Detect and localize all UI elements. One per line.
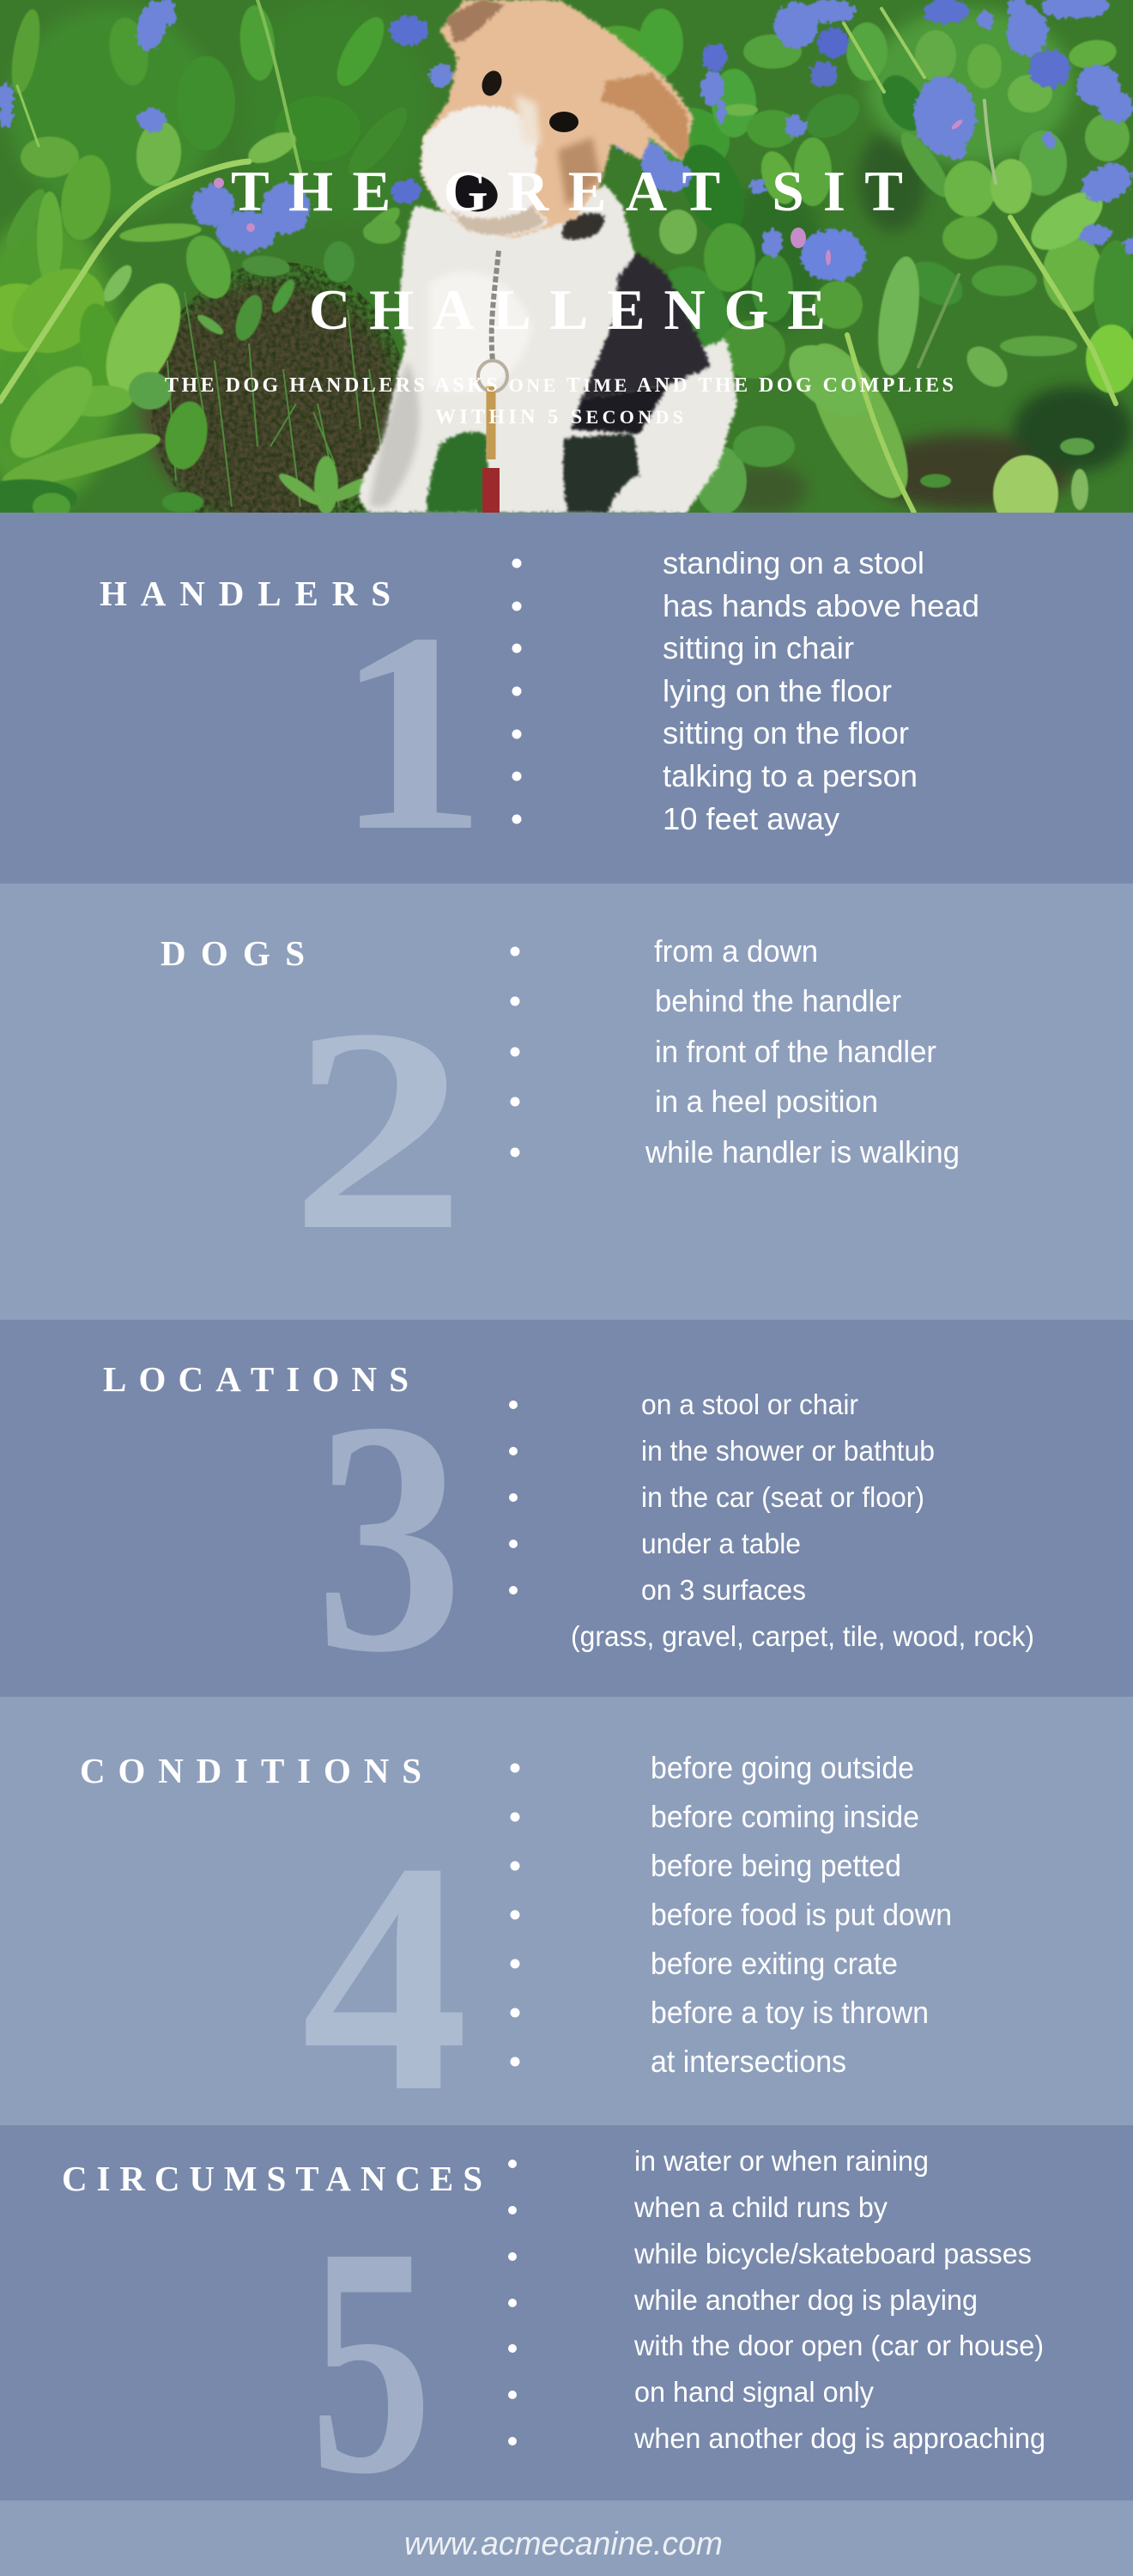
panel: handlers [0,513,1133,890]
conditions list: before food is put down [651,1897,952,1932]
hero subtitle [165,378,953,424]
dogs list: from a down [654,933,818,969]
number 4: 4 [301,1794,469,2160]
neck shadow [562,213,605,240]
fur shading on chest [429,271,532,392]
circumstances list: when another dog is approaching [633,2422,1045,2454]
circumstances list: with the door open (car or house) [633,2330,1044,2361]
ear shadow [601,73,689,161]
locations list: in the car (seat or floor) [641,1481,924,1513]
number 3: 3 [315,1353,464,1721]
circumstances list [508,2145,1045,2454]
handlers list: sitting in chair [663,630,854,665]
heading: dogs: DOGS [161,933,305,973]
hero subtitle: THE DOG HANDLERS ASKS ONE TIME AND THE DOG COMPLIES [165,374,954,397]
number 2: 2 [290,969,466,1291]
dogs list [510,933,960,1170]
heading: handlers: HANDLERS [100,574,391,613]
conditions list [510,1750,952,2079]
dogs list: in a heel position [655,1084,878,1119]
white muzzle and cheek [421,106,549,236]
handlers list: sitting on the floor [663,715,909,750]
number 1: 1 [336,574,487,890]
circumstances list: in water or when raining [634,2145,929,2177]
circumstances list: on hand signal only [634,2376,874,2408]
foliage between front legs [427,432,488,513]
website url: www.acmecanine.com [404,2526,723,2562]
handlers list: 10 feet away [663,801,839,836]
panel: circumstances [0,2125,1133,2542]
handlers list: standing on a stool [663,545,924,580]
dogs list: behind the handler [655,983,901,1018]
pink buds [214,118,964,265]
panel: conditions [0,1697,1133,2160]
hero subtitle: WITHIN 5 SECONDS [435,406,683,428]
grass blades [167,292,386,507]
black patch [581,252,711,401]
locations list [509,1388,1034,1652]
locations list: on 3 surfaces [641,1574,806,1606]
panel: dogs [0,884,1133,1320]
dogs list: while handler is walking [645,1134,960,1170]
handlers list: has hands above head [663,588,979,623]
middle and right foliage [603,26,640,58]
heading: circumstances: CIRCUMSTANCES [62,2159,482,2198]
conditions list: before going outside [651,1750,914,1785]
circumstances list: when a child runs by [633,2191,888,2223]
handlers list: talking to a person [663,758,918,793]
stems [0,0,1116,513]
conditions list: before being petted [651,1848,901,1883]
head base tan [421,0,694,238]
locations list: in the shower or bathtub [641,1435,935,1467]
circumstances list: while bicycle/skateboard passes [633,2238,1032,2269]
conditions list: before a toy is thrown [651,1995,929,2030]
heading: locations: LOCATIONS [103,1359,409,1399]
dog body [359,185,736,513]
heading: conditions: CONDITIONS [80,1751,421,1790]
conditions list: at intersections [651,2044,846,2079]
number 5: 5 [310,2180,432,2542]
panel: locations [0,1320,1133,1721]
handlers list: lying on the floor [663,673,892,708]
speckled ground [146,258,412,513]
locations list: under a table [641,1528,801,1559]
footer band [0,2500,1133,2576]
hero title: THE GREAT SIT [231,160,903,223]
hero title: CHALLENGE [309,278,826,342]
circumstances list: while another dog is playing [633,2284,978,2316]
handlers list [512,545,979,836]
bluebell clusters [0,0,1133,281]
chain and ring [492,251,499,361]
hero title [232,172,902,330]
hero photo: dog among bluebells [0,0,1133,532]
locations list: (grass, gravel, carpet, tile, wood, rock) [571,1620,1034,1652]
eyes [482,70,501,96]
nose [455,175,498,211]
locations list: on a stool or chair [641,1388,858,1420]
leaves [0,3,1133,532]
conditions list: before exiting crate [651,1946,898,1981]
dog [359,0,736,513]
conditions list: before coming inside [651,1799,919,1834]
dogs list: in front of the handler [655,1034,936,1069]
